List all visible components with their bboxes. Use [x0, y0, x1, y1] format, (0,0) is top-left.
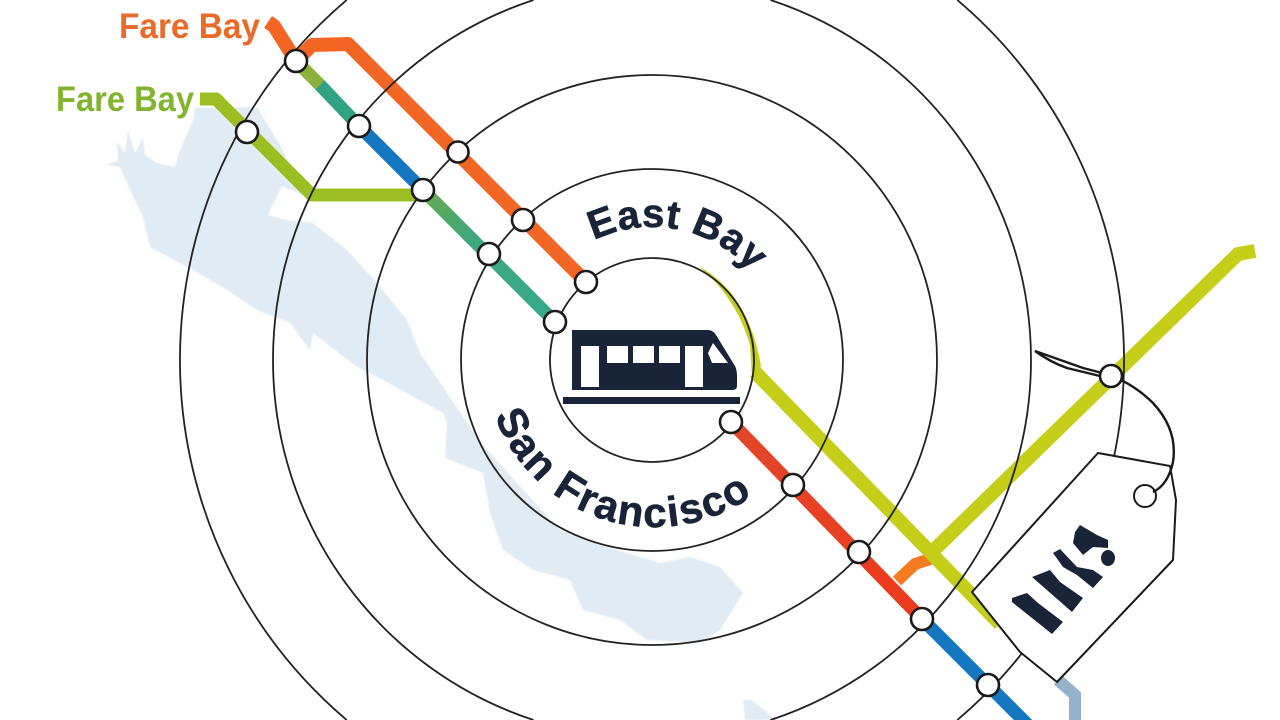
- transit line: grey-blue spur: [1058, 680, 1075, 720]
- transit line: yellow curve into centre: [698, 266, 761, 376]
- tag hole: [1134, 485, 1156, 507]
- station markers: [236, 50, 1122, 696]
- icon: train: [563, 330, 740, 404]
- concentric zone rings: [180, 0, 1124, 720]
- transit line: orange: [268, 22, 586, 282]
- label: East Bay: East Bay: [586, 202, 767, 268]
- tag string: [1035, 351, 1174, 492]
- transit line: green, teal and blue diagonal: [296, 61, 555, 322]
- tag icon: skyline: [1012, 525, 1115, 634]
- tag outline: [972, 453, 1176, 682]
- transit line: green branch: [200, 99, 423, 195]
- map: bay area landmass: [107, 107, 776, 720]
- transit line: orange stub: [897, 557, 936, 581]
- label: San Francisco: San Francisco: [498, 408, 748, 528]
- label: Fare Bay green: Fare Bay: [56, 80, 194, 119]
- label: Fare Bay orange: Fare Bay: [119, 7, 260, 46]
- train windows and doors: [581, 343, 728, 387]
- train rail: [563, 397, 740, 404]
- transit line: yellow diagonal: [755, 251, 1255, 624]
- train body: [572, 330, 737, 390]
- transit line: red: [731, 422, 922, 619]
- transit line: blue: [917, 614, 1032, 720]
- fare tag: [972, 351, 1176, 682]
